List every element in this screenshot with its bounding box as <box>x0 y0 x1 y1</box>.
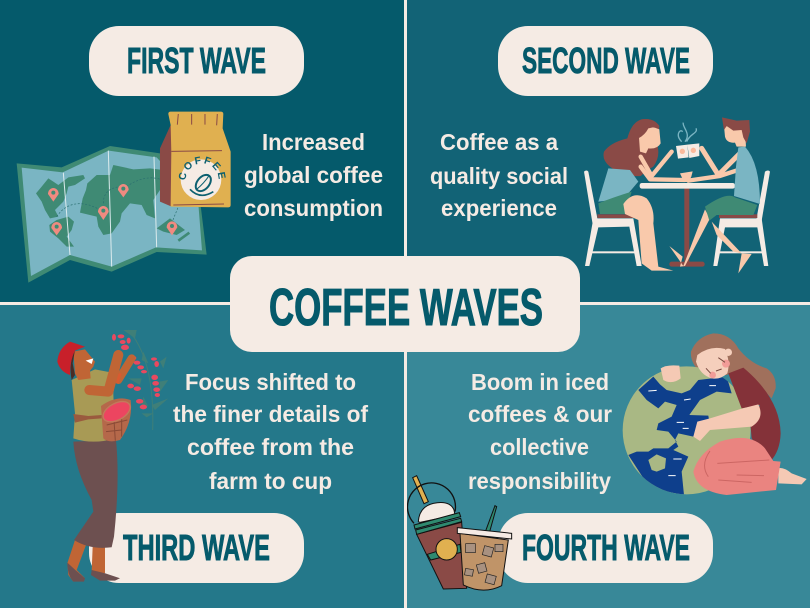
back arm <box>118 358 132 380</box>
third wave text: coffee from the <box>187 434 354 460</box>
first wave text: consumption <box>244 195 383 221</box>
fourth wave text: Boom in iced <box>471 369 609 395</box>
first wave label: FIRST WAVE <box>127 40 266 81</box>
fourth wave text: collective <box>490 434 589 460</box>
panel: second wave background <box>407 0 810 302</box>
icon: woman picking coffee cherries <box>57 330 168 582</box>
fourth wave text: responsibility <box>468 468 611 494</box>
first wave label <box>89 26 304 96</box>
icon: couple sharing coffee <box>584 117 770 273</box>
first wave text: Increased <box>262 129 365 155</box>
second wave text: quality social <box>430 163 568 189</box>
cups and steam <box>676 143 699 159</box>
arm <box>693 404 761 441</box>
second wave text <box>430 129 568 221</box>
fourth wave text <box>468 369 612 494</box>
globe <box>623 366 751 494</box>
table <box>684 187 689 263</box>
fourth wave label <box>498 513 713 583</box>
title: COFFEE WAVES <box>269 279 543 337</box>
dress <box>728 368 781 462</box>
second wave text: Coffee as a <box>440 129 558 155</box>
legs <box>778 468 807 484</box>
head <box>696 348 729 379</box>
third wave text: the finer details of <box>173 401 368 427</box>
icon: woman hugging earth <box>623 333 807 495</box>
panel: third wave background <box>0 305 404 608</box>
hair back <box>691 333 776 398</box>
third wave text: farm to cup <box>209 468 332 494</box>
icon: iced coffee cups <box>407 476 512 590</box>
icon: world map <box>17 146 207 283</box>
icon: coffee bag: COFFEE <box>178 156 226 180</box>
skirt <box>73 440 118 548</box>
basket <box>101 398 131 441</box>
front arm <box>89 355 118 392</box>
third wave heading: THIRD WAVE <box>123 527 270 568</box>
second wave label: SECOND WAVE <box>522 40 690 81</box>
third wave text: Focus shifted to <box>185 369 356 395</box>
fourth wave text: coffees & our <box>468 401 612 427</box>
first wave text <box>244 129 383 221</box>
panel: first wave background <box>0 0 404 302</box>
legs and shoes <box>67 540 87 582</box>
second wave label <box>498 26 713 96</box>
first wave text: global coffee <box>244 162 383 188</box>
left chair <box>584 170 642 266</box>
right chair <box>713 170 770 266</box>
fourth wave label: FOURTH WAVE <box>522 527 690 568</box>
panel: fourth wave background <box>407 305 810 608</box>
coffee branch <box>128 330 153 430</box>
second wave text: experience <box>441 195 557 221</box>
woman <box>603 119 659 176</box>
third wave text <box>173 369 368 494</box>
icon: coffee bag <box>160 112 231 208</box>
center title pill <box>230 256 580 352</box>
shirt <box>72 369 116 442</box>
third wave pill <box>89 513 304 583</box>
head and headscarf <box>73 349 95 380</box>
man <box>702 148 740 175</box>
